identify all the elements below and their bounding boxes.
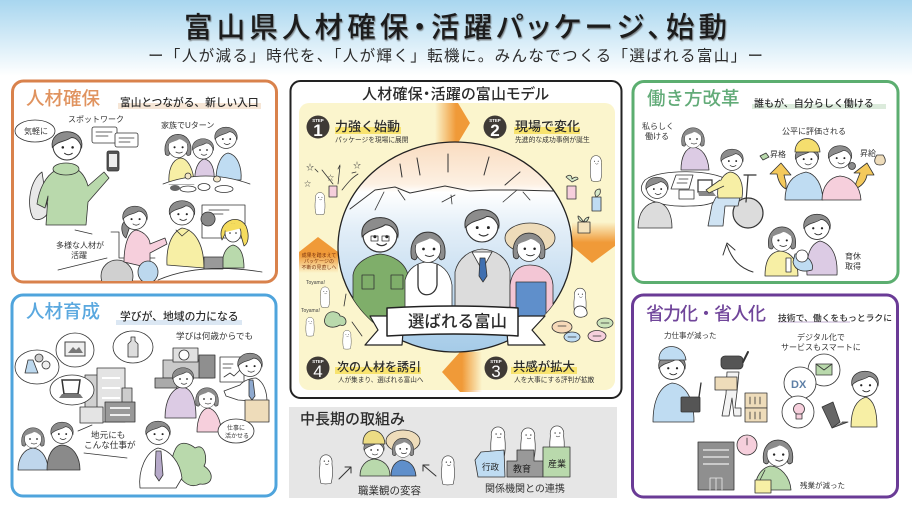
step 2: 現場で変化 <box>515 119 580 134</box>
cream background <box>299 103 615 390</box>
label: 多様な人材が活躍: 多様な人材が <box>56 240 104 250</box>
arrow: raise <box>854 163 874 189</box>
step 2: 2 <box>490 121 500 140</box>
step 2 <box>484 116 590 144</box>
step 4: 人が集まり、選ばれる富山へ <box>338 375 424 384</box>
heading: 人材育成 <box>26 301 100 322</box>
figure: young woman <box>196 388 221 432</box>
label: 学びは何歳からでも: 学びは何歳からでも <box>176 330 253 341</box>
step 4 <box>306 356 424 384</box>
figure: woman with bag <box>755 440 793 493</box>
panel heading: 人材確保・活躍の富山モデル <box>362 85 549 103</box>
mascot: green blob <box>172 443 211 486</box>
arrow: step 2 to 3 <box>572 222 615 263</box>
note: review text: 不断の見直しへ <box>301 264 337 271</box>
figure: standing woman <box>681 128 709 170</box>
label: 残業が減った: 残業が減った <box>800 480 845 490</box>
step 4: 次の人材を誘引 <box>337 359 421 374</box>
panel: 人材育成 <box>12 295 276 496</box>
bubble: mail <box>808 354 840 386</box>
arrow: curved <box>723 243 753 272</box>
label: デジタル化で <box>781 332 861 352</box>
figure: seated colleague <box>638 177 672 228</box>
figure: man in yellow <box>167 201 204 268</box>
bubble: DX: DX <box>791 379 807 391</box>
label: デジタル化で: デジタル化で <box>797 332 845 342</box>
step 2: 先進的な成功事例が誕生 <box>515 135 590 144</box>
label: 多様な人材が活躍 <box>56 230 107 270</box>
subtitle: ー「人が減る」時代を、「人が輝く」転機に。みんなでつくる「選ばれる富山」ー <box>148 47 763 65</box>
speech bubble: 仕事に活かせる: 仕事に <box>227 424 245 432</box>
figure: office worker <box>140 421 182 488</box>
doodle: step 1 launch: ☆ <box>306 163 314 172</box>
figure: worker with tablet <box>653 346 701 422</box>
heading: 省力化・省人化 <box>646 304 766 324</box>
panel border <box>632 295 898 497</box>
panel border <box>290 81 622 398</box>
clock <box>737 435 757 455</box>
arrow: step 1 to 2 <box>435 103 470 143</box>
step 3: 共感が拡大 <box>513 359 575 374</box>
tagline underline <box>116 320 242 325</box>
card: 教育: 教育 <box>513 463 531 474</box>
doodle: step 1 launch: ☆ <box>304 179 311 188</box>
label: 育休取得 <box>845 251 861 271</box>
note: review text: パッケージの <box>304 258 334 265</box>
speech bubble: flask <box>15 350 59 384</box>
speech bubble: painting <box>56 333 94 367</box>
figure: robot <box>715 352 748 416</box>
doodle: step 4 Toyama fans: Toyama! <box>301 308 320 314</box>
card: 行政: 行政 <box>482 462 500 472</box>
step 1 <box>306 116 409 144</box>
speech bubble: sake bottle <box>113 331 153 363</box>
illustration: four residents <box>353 210 555 330</box>
cardboard boxes <box>745 393 767 422</box>
panel: 人材確保 <box>12 81 276 292</box>
arrow right <box>423 465 436 476</box>
ribbon: 選ばれる富山: 選ばれる富山 <box>408 312 507 331</box>
note: review text: 成果を踏まえて <box>302 252 336 259</box>
label: 関係機関との連携: 関係機関との連携 <box>485 482 565 495</box>
figures: worker and farmer <box>360 430 420 476</box>
heading: 人材確保 <box>26 88 101 109</box>
figure: man in wheelchair <box>706 149 763 228</box>
figures: stakeholders <box>491 426 564 460</box>
figure: woman in wheelchair <box>100 206 168 281</box>
bubble: DX <box>784 367 816 399</box>
figure: person right <box>441 456 455 485</box>
school building <box>155 348 215 388</box>
label: 昇格: 昇格 <box>770 149 786 159</box>
step 3: 人を大事にする評判が拡散 <box>514 375 595 384</box>
figure: parents with baby <box>765 214 837 276</box>
figure: person left <box>319 455 333 484</box>
header background <box>0 0 912 76</box>
office building <box>698 442 734 490</box>
speech bubble: 気軽に <box>15 120 55 142</box>
speech bubble: 気軽に: 気軽に <box>24 126 48 136</box>
label: 私らしく働ける: 働ける <box>645 131 669 141</box>
arrow left <box>339 467 351 479</box>
label: 家族でUターン: 家族でUターン <box>161 120 214 130</box>
arrow: step 4 to 1 <box>299 237 338 273</box>
label: 力仕事が減った: 力仕事が減った <box>664 330 716 340</box>
tagline: 技術で、働くをもっとラクに <box>778 312 892 323</box>
step 3: 3 <box>491 362 501 381</box>
label: 地元にもこんな仕事が <box>78 425 136 458</box>
label: 多様な人材が活躍: 活躍 <box>71 250 87 260</box>
doodle: step 4 Toyama fans <box>301 280 362 349</box>
buildings <box>80 368 135 423</box>
ribbon: 選ばれる富山 <box>365 306 545 345</box>
figure: family at table <box>163 127 250 192</box>
label: 育休取得: 取得 <box>845 261 861 271</box>
figure: student with phone <box>30 132 119 225</box>
heading: 中長期の取組み <box>300 411 405 428</box>
speech bubble: laptop <box>50 375 94 405</box>
figure: man with laptop <box>822 371 878 428</box>
label: スポットワーク: スポットワーク <box>68 115 124 124</box>
step 4: 4 <box>313 362 323 381</box>
panel border <box>12 81 276 282</box>
note: review text <box>301 252 337 271</box>
label: デジタル化で: サービスもスマートに <box>781 343 861 352</box>
table <box>641 172 727 206</box>
step 1: パッケージを現場に展開 <box>335 135 409 144</box>
arrow: step 3 to 4 <box>442 352 482 392</box>
tagline: 富山とつながる、新しい入口 <box>120 96 259 109</box>
panel border <box>12 295 276 496</box>
illustration: Tateyama dome <box>338 142 572 352</box>
panel: 働き方改革 <box>633 82 898 282</box>
step 4: STEP <box>312 359 324 364</box>
arrow: promotion <box>770 163 791 189</box>
tagline: 誰もが、自分らしく働ける <box>754 97 874 110</box>
figure: older learner <box>165 368 196 418</box>
figure: woman with ID <box>822 146 861 200</box>
whiteboard <box>220 357 244 382</box>
tagline underline <box>752 104 886 109</box>
heading: 働き方改革 <box>647 88 740 109</box>
figure: teacher <box>224 353 269 422</box>
speech bubble: 仕事に活かせる <box>218 419 254 443</box>
doodle: step 2 growth <box>566 156 602 233</box>
doodle: step 1 launch: ☆ <box>327 173 334 182</box>
panel: 省力化・省人化 <box>632 295 898 497</box>
card: 教育 <box>507 450 543 477</box>
step 1: 力強く始動 <box>335 119 400 134</box>
doodle: step 3 reputation <box>552 288 613 342</box>
speech bubble: 仕事に活かせる: 活かせる <box>225 432 249 440</box>
card: 産業 <box>543 447 570 477</box>
label: 私らしく働ける: 私らしく <box>642 121 674 131</box>
label: 昇給 <box>860 148 885 165</box>
label: 昇格 <box>760 149 786 160</box>
bubble: AI <box>782 396 814 428</box>
label: 地元にもこんな仕事が: こんな仕事が <box>84 439 136 450</box>
doodle: step 4 Toyama fans: Toyama! <box>306 280 325 286</box>
doodle: step 1 launch: ☆ <box>353 161 361 170</box>
figure: blonde woman <box>158 219 262 280</box>
panel background <box>289 407 617 498</box>
step 1: STEP <box>312 118 324 123</box>
tagline underline <box>778 321 850 323</box>
card: 産業: 産業 <box>548 458 566 469</box>
title: 富山県人材確保・活躍パッケージ、始動 <box>184 12 727 44</box>
chat bubbles <box>92 127 138 147</box>
panel border <box>633 82 898 282</box>
figure: students <box>18 422 80 470</box>
tagline: 学びが、地域の力になる <box>120 309 239 323</box>
label: 職業観の変容: 職業観の変容 <box>358 484 421 497</box>
label: 昇給: 昇給 <box>860 148 876 158</box>
label: 地元にもこんな仕事が: 地元にも <box>91 429 125 440</box>
presentation board <box>201 205 245 238</box>
figure: worker with helmet <box>785 138 823 200</box>
tagline underline <box>118 103 261 109</box>
label: 私らしく働ける <box>642 121 674 141</box>
panel: 富山モデル <box>290 81 622 398</box>
doodle: step 1 launch <box>304 161 361 215</box>
card: 行政 <box>475 450 505 477</box>
step 2: STEP <box>489 118 501 123</box>
step 3: STEP <box>490 359 502 364</box>
step 1: 1 <box>313 121 323 140</box>
label: 公平に評価される: 公平に評価される <box>782 126 846 136</box>
step 3 <box>484 356 595 384</box>
documents and laptop <box>671 175 716 199</box>
label: 育休取得: 育休 <box>845 251 861 261</box>
panel: 中長期の取組み <box>289 407 617 498</box>
